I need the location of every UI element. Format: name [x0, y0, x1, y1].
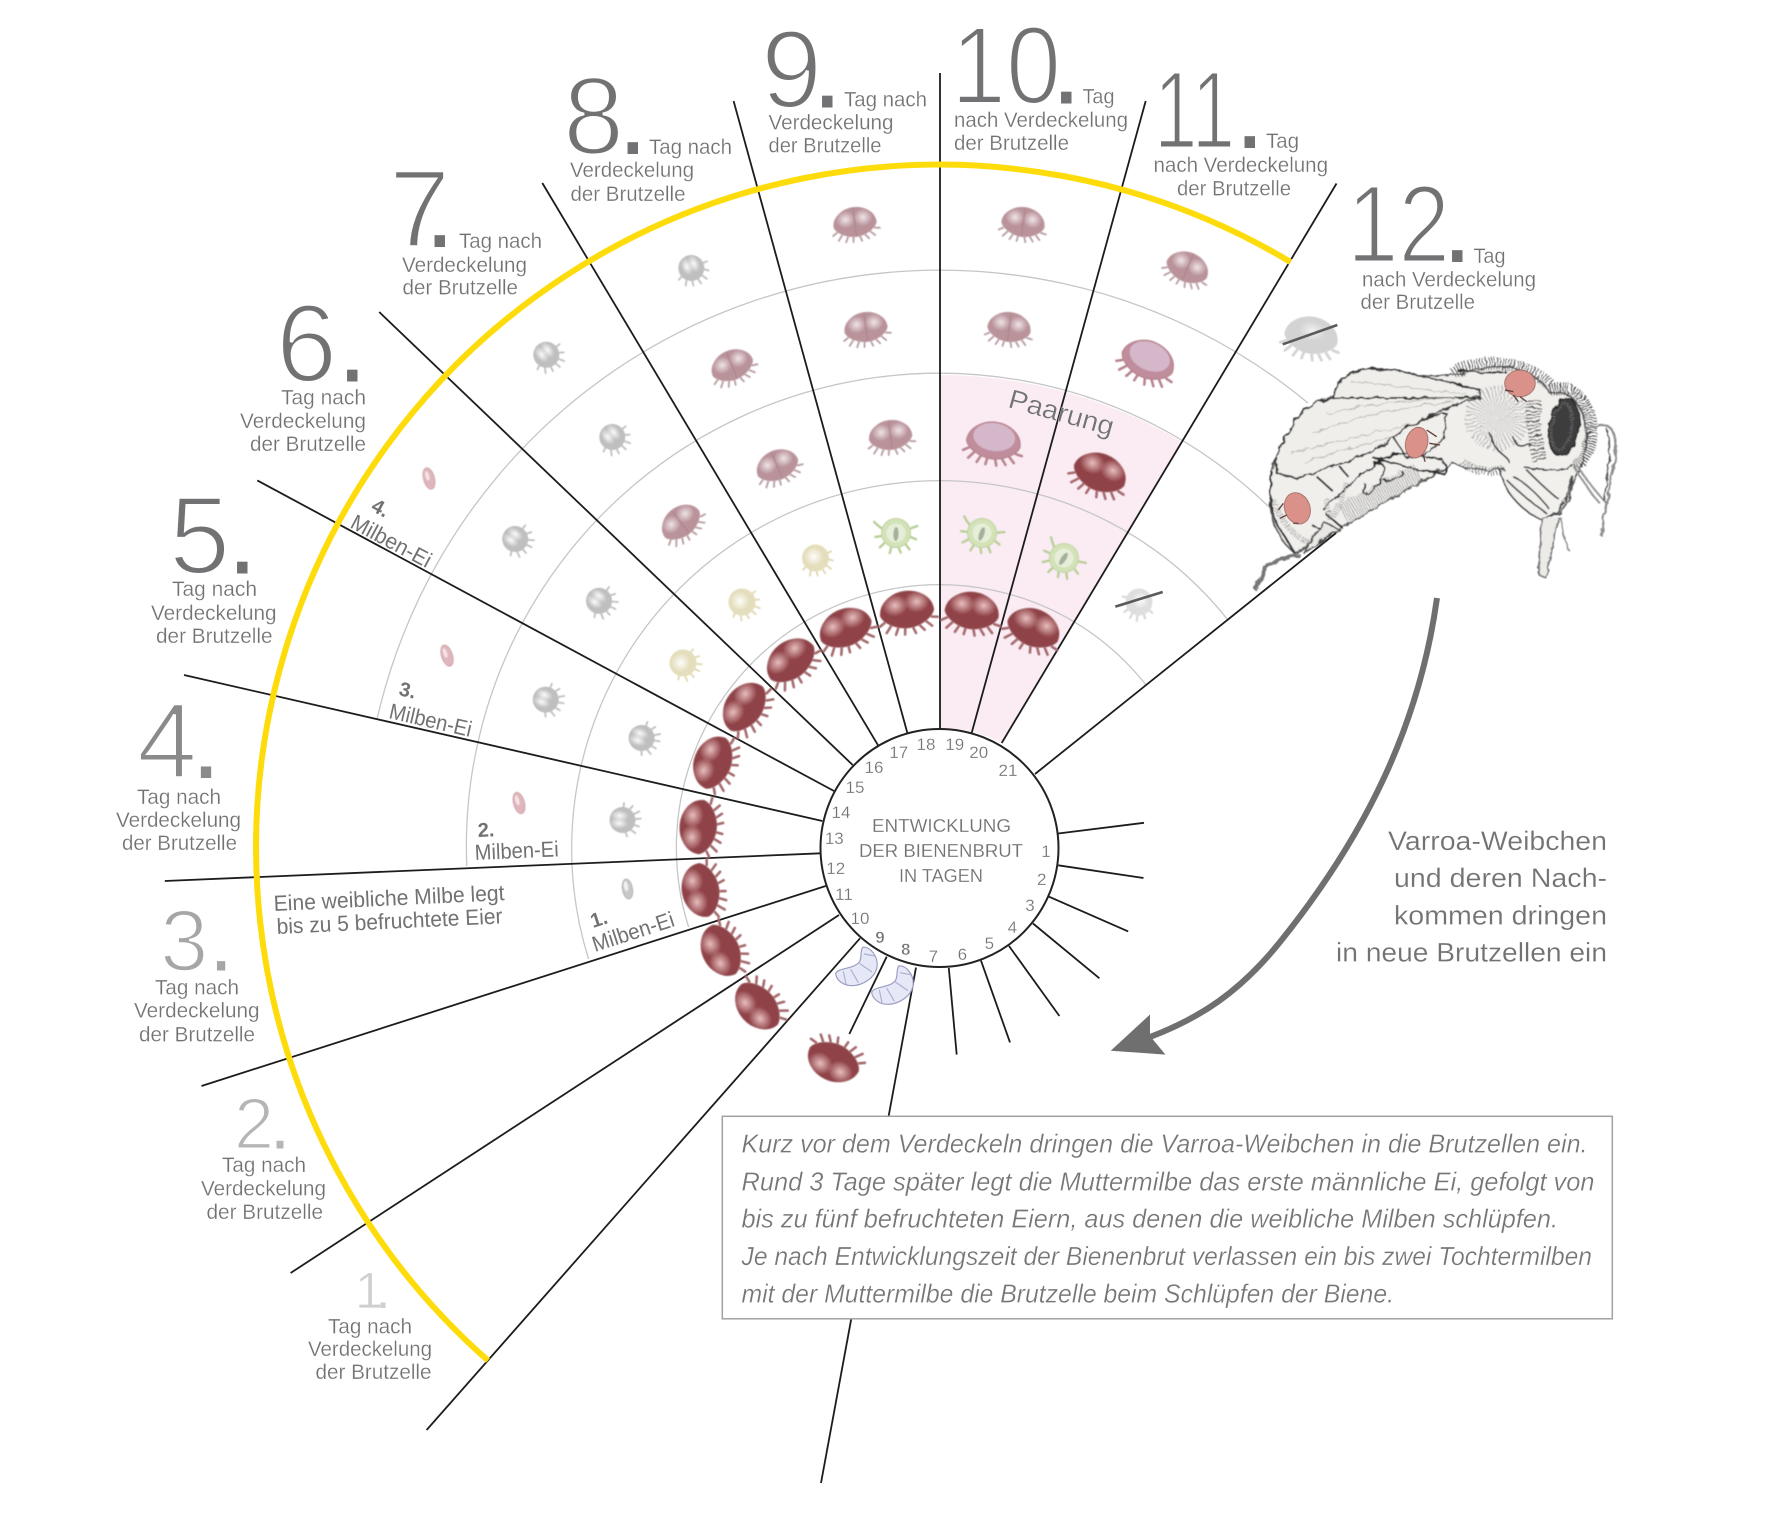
day label 3: der Brutzelle: [139, 1024, 255, 1046]
day label 10: der Brutzelle: [954, 132, 1069, 155]
day label 5: .: [227, 474, 258, 598]
dial day numbers: 6: [958, 945, 967, 964]
dial day numbers: 12: [826, 859, 845, 878]
dial title: IN TAGEN: [899, 865, 983, 886]
icon: bee larvae: [836, 947, 913, 1004]
day label 3: .: [209, 892, 233, 990]
note: up to five eggs: bis zu 5 befruchtete Eier: [276, 903, 503, 939]
dial day numbers: 2: [1037, 870, 1046, 889]
day label 12: 12: [1347, 163, 1450, 286]
day label 1: Verdeckelung: [308, 1338, 432, 1361]
label: 3. Milben-Ei: Milben-Ei: [387, 699, 474, 742]
day label 2: .: [270, 1084, 290, 1164]
dial title: ENTWICKLUNG: [872, 815, 1011, 836]
panel: explanation box: Kurz vor dem Verdeckeln dringen die Varroa-Weibchen in die Brutzellen ein.: [742, 1128, 1588, 1158]
day label 2: [201, 1084, 326, 1224]
day label 6: [240, 282, 368, 456]
label: 1. Milben-Ei: Milben-Ei: [589, 907, 677, 957]
bee silhouette: [1270, 367, 1587, 553]
day label 3: Tag nach: [155, 976, 239, 1000]
text block: mites enter new cells: kommen dringen: [1394, 900, 1607, 930]
day label 12: [1347, 163, 1536, 314]
dial title: [859, 815, 1023, 886]
day label 8: der Brutzelle: [570, 183, 686, 206]
day label 3: [134, 892, 260, 1046]
dial day numbers: [825, 735, 1051, 966]
panel: explanation box: bis zu fünf befruchteten Eiern, aus denen die weibliche Milben schlüpfen.: [742, 1204, 1558, 1234]
label: 4. Milben-Ei: Milben-Ei: [347, 509, 436, 573]
day label 5: [151, 474, 276, 648]
concentric day rings: [377, 270, 1308, 959]
day label 1: 1: [355, 1262, 383, 1319]
mites: third row: [511, 417, 1135, 815]
day label 10: [951, 4, 1128, 155]
yellow capped-cell arc: [256, 165, 1291, 1360]
day label 7: Tag nach: [459, 230, 542, 253]
day label 1: [308, 1262, 432, 1384]
panel: explanation box: Je nach Entwicklungszeit der Bienenbrut verlassen ein bis zwei Tochtermilben: [741, 1241, 1592, 1271]
day label 6: 6: [276, 282, 337, 406]
day label 8: 8: [563, 55, 624, 178]
label: 3. Milben-Ei: 3.: [397, 678, 418, 704]
dial day numbers: 3: [1025, 896, 1035, 915]
day label 9: der Brutzelle: [768, 134, 882, 158]
day label 11: der Brutzelle: [1177, 178, 1291, 200]
note: up to five eggs: [273, 880, 505, 939]
day label 1: .: [376, 1262, 390, 1319]
day label 5: der Brutzelle: [156, 625, 272, 648]
day label 9: Tag nach: [844, 88, 927, 112]
day label 1: der Brutzelle: [316, 1361, 432, 1384]
text block: mites enter new cells: und deren Nach-: [1394, 863, 1607, 893]
strike-through marks on dead mites: [1115, 325, 1337, 607]
panel: explanation box: mit der Muttermilbe die Brutzelle beim Schlüpfen der Biene.: [742, 1278, 1394, 1308]
day label 8: .: [618, 55, 648, 178]
dial day numbers: 20: [969, 743, 988, 762]
mites: fourth row: [438, 309, 1183, 668]
mites: second row, first offspring: [608, 516, 1161, 900]
day label 2: Tag nach: [222, 1154, 306, 1177]
mites: innermost row, mother mite: [677, 587, 1069, 1092]
day label 3: 3: [160, 892, 208, 990]
text block: mites enter new cells: Varroa-Weibchen: [1388, 826, 1607, 856]
label: 1. Milben-Ei: 1.: [588, 907, 610, 933]
text block: mites enter new cells: in neue Brutzellen ein: [1336, 938, 1607, 968]
day label 8: [563, 55, 732, 206]
dial day numbers: 7: [929, 947, 938, 966]
dial day numbers: 9: [875, 928, 885, 947]
day label 10: .: [1051, 4, 1082, 128]
dial day numbers: 17: [889, 743, 908, 762]
dial day numbers: 1: [1041, 842, 1051, 861]
day label 8: Verdeckelung: [570, 159, 694, 182]
day label 7: [389, 148, 542, 300]
mites on bee: [1278, 370, 1535, 528]
day label 6: Tag nach: [281, 386, 366, 410]
label: 3. Milben-Ei: [387, 678, 474, 742]
dial day numbers: 18: [917, 735, 935, 754]
day label 4: 4: [137, 680, 197, 801]
dial day numbers: 5: [985, 934, 994, 953]
day label 8: Tag nach: [649, 136, 732, 159]
day label 12: Tag: [1474, 245, 1506, 268]
dial day numbers: 8: [901, 940, 910, 959]
day label 4: .: [191, 680, 221, 801]
day label 6: .: [337, 282, 368, 406]
day label 12: .: [1442, 163, 1473, 286]
illustration: bee with mites: [1255, 364, 1616, 590]
day label 7: der Brutzelle: [402, 276, 518, 300]
label: 4. Milben-Ei: 4.: [368, 495, 393, 522]
heading: Paarung: Paarung: [1005, 384, 1117, 442]
day label 2: der Brutzelle: [206, 1201, 323, 1224]
day label 11: .: [1234, 49, 1265, 172]
bee abdomen: [1270, 413, 1447, 553]
day label 11: [1154, 49, 1328, 200]
dial day numbers: 21: [999, 761, 1017, 780]
bee lower body and legs: [1255, 425, 1616, 590]
panel: explanation box: [722, 1116, 1612, 1319]
day label 9: .: [812, 8, 843, 132]
day label 10: Tag: [1082, 86, 1114, 108]
bee wings: [1276, 368, 1480, 478]
day label 10: 10: [951, 4, 1061, 128]
label: 2. Milben-Ei: [474, 819, 559, 865]
day label 6: der Brutzelle: [250, 433, 366, 456]
note: up to five eggs: Eine weibliche Milbe legt: [273, 880, 505, 916]
day label 4: [116, 680, 241, 855]
label: 2. Milben-Ei: Milben-Ei: [474, 836, 559, 865]
day label 12: nach Verdeckelung: [1362, 268, 1536, 292]
day label 10: nach Verdeckelung: [954, 109, 1128, 132]
day label 5: Verdeckelung: [151, 602, 276, 625]
text block: mites enter new cells: [1336, 826, 1607, 968]
dial day numbers: 14: [832, 803, 850, 822]
radial spokes: [165, 73, 1336, 1483]
dial day numbers: 16: [865, 758, 883, 777]
day label 11: Tag: [1266, 130, 1299, 153]
centre dial: [820, 729, 1058, 967]
day label 4: Tag nach: [137, 786, 221, 809]
day label 7: .: [424, 148, 455, 271]
day label 5: Tag nach: [172, 578, 257, 601]
day label 6: Verdeckelung: [240, 410, 366, 433]
day label 11: nach Verdeckelung: [1154, 154, 1328, 177]
bee thorax hair: [1453, 364, 1591, 471]
dial day numbers: 19: [945, 735, 964, 754]
day label 9: 9: [761, 8, 822, 132]
panel: explanation box: Rund 3 Tage später legt die Muttermilbe das erste männliche Ei, gefolgt von: [742, 1166, 1594, 1196]
bee eye: [1545, 396, 1583, 459]
dial day numbers: 10: [851, 909, 869, 928]
day label 2: 2: [234, 1084, 274, 1164]
day label 2: Verdeckelung: [201, 1178, 326, 1200]
day label 3: Verdeckelung: [134, 1000, 260, 1022]
dial day numbers: 13: [825, 829, 844, 848]
day label 7: 7: [389, 148, 450, 271]
day label 7: Verdeckelung: [402, 254, 527, 277]
label: 2. Milben-Ei: 2.: [477, 819, 495, 842]
day label 9: Verdeckelung: [768, 112, 894, 134]
day label 4: Verdeckelung: [116, 809, 241, 832]
dial day numbers: 15: [846, 778, 864, 797]
arrow: into new brood cells: [1111, 598, 1437, 1055]
day label 9: [761, 8, 927, 158]
dial day numbers: 4: [1008, 918, 1017, 937]
day label 5: 5: [169, 474, 230, 598]
day label 1: Tag nach: [328, 1316, 412, 1338]
panel: mating zone: [940, 375, 1182, 743]
dial day numbers: 11: [835, 885, 853, 904]
day label 11: 11: [1154, 49, 1235, 172]
dial title: DER BIENENBRUT: [859, 840, 1023, 861]
day label 4: der Brutzelle: [122, 832, 237, 855]
day label 12: der Brutzelle: [1360, 291, 1475, 314]
mites: fifth row: [421, 204, 1345, 491]
